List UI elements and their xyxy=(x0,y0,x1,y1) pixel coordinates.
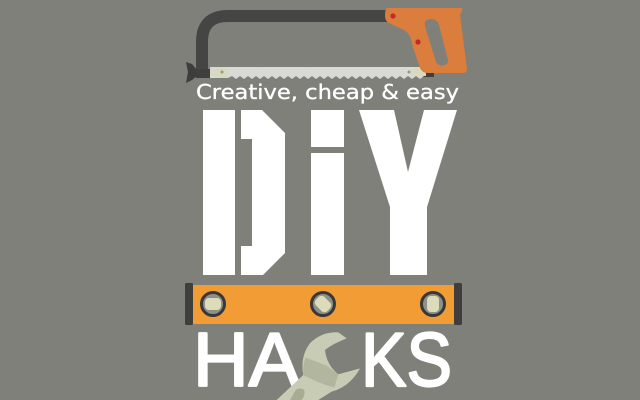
rivets xyxy=(390,13,396,19)
saw handle xyxy=(385,8,467,73)
wrench forming the letter C xyxy=(276,332,360,400)
letter Y xyxy=(359,110,457,275)
letter D: D xyxy=(197,59,292,327)
title: HACKS xyxy=(198,331,450,400)
subtitle: Creative, cheap & easy xyxy=(196,80,459,104)
level end caps xyxy=(185,283,193,325)
left vial xyxy=(202,292,224,316)
letter i: i xyxy=(303,68,345,325)
saw frame xyxy=(202,16,388,70)
letter Y: Y xyxy=(358,59,456,327)
centre vial xyxy=(312,292,334,316)
letter D xyxy=(203,110,285,275)
icon: hacksaw xyxy=(186,8,467,83)
blade clamps xyxy=(210,68,228,78)
icon: spirit level xyxy=(185,283,462,325)
letter i xyxy=(311,110,344,275)
level body xyxy=(192,285,455,324)
saw blade xyxy=(210,67,424,79)
right vial xyxy=(422,292,444,316)
wing nut xyxy=(186,62,197,83)
title: DIY xyxy=(203,110,457,275)
